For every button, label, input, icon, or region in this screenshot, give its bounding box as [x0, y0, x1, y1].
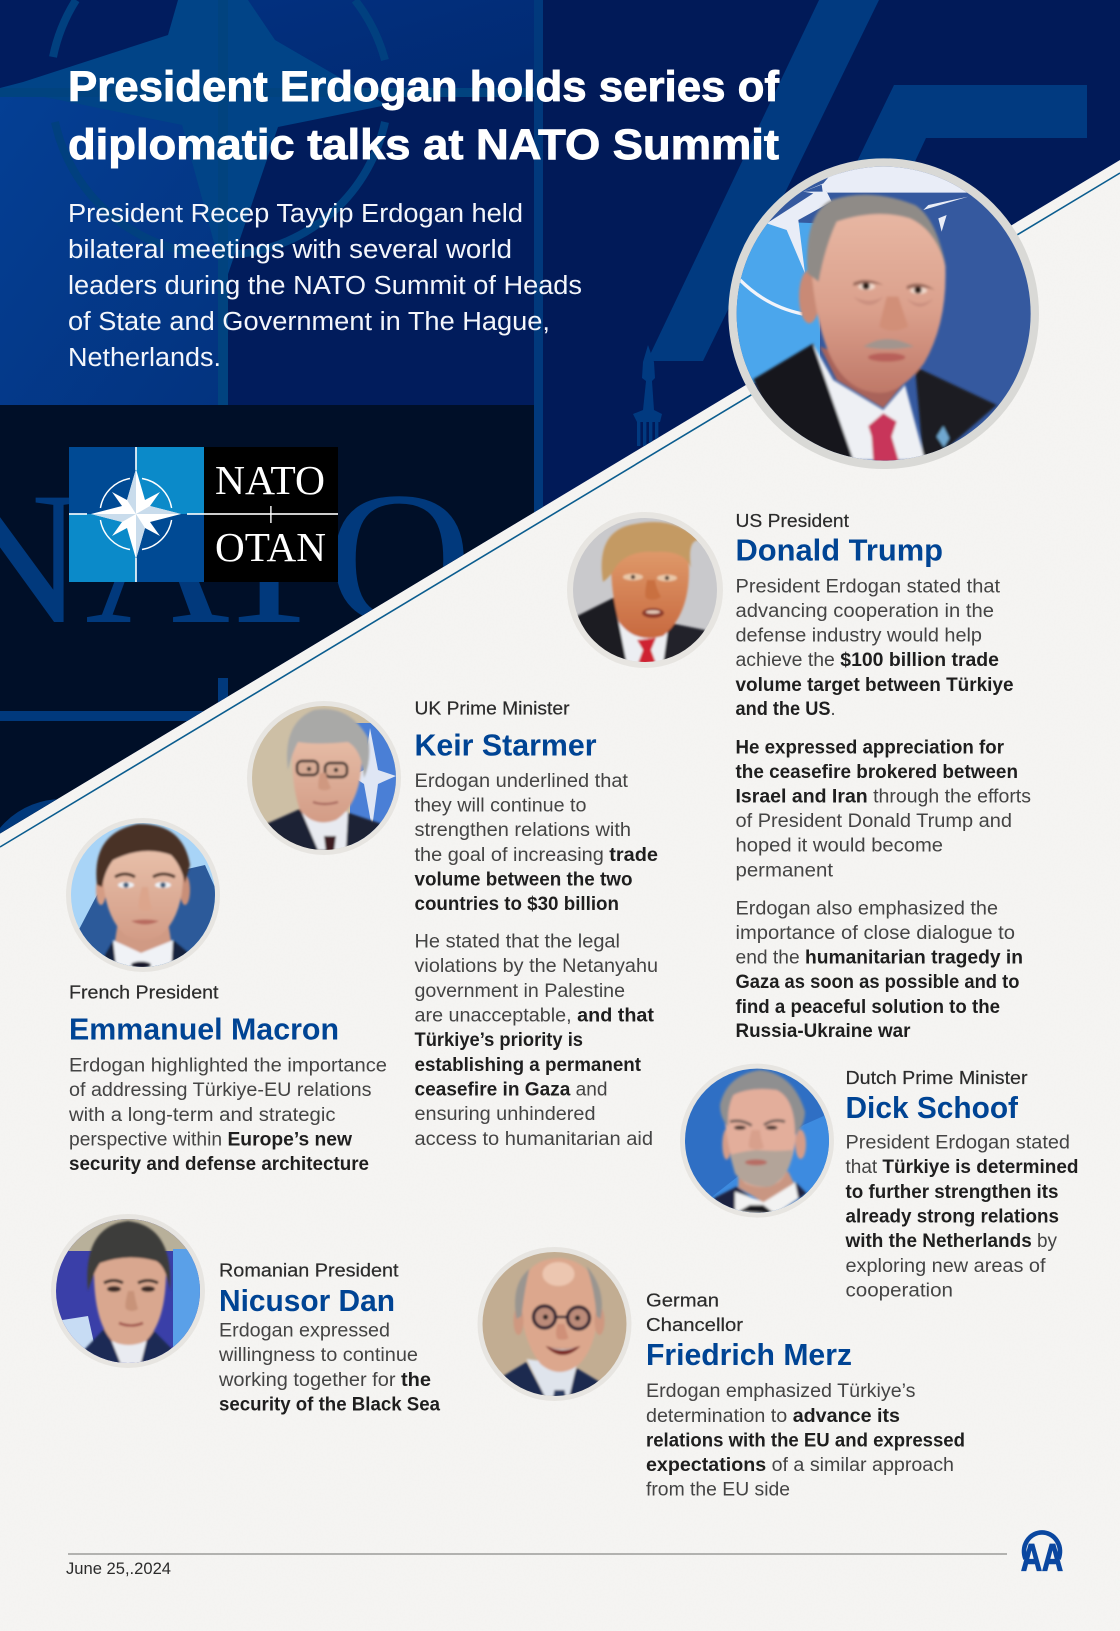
role: UK Prime Minister: UK Prime Minister [414, 698, 570, 719]
text block: Merz talks: determination to advance its [646, 1406, 900, 1427]
text block: Trump talks [736, 577, 1031, 1042]
name: Nicusor Dan: Nicusor Dan [219, 1283, 395, 1318]
text block: Schoof talks: cooperation [846, 1281, 953, 1302]
text block: Starmer talks: the goal of increasing trade [414, 845, 658, 866]
portrait: Donald Trump [565, 510, 725, 670]
text block: Trump talks: importance of close dialogue to [736, 923, 1015, 944]
intro text: President Recep Tayyip Erdogan held [68, 200, 523, 228]
text block: Starmer talks: strengthen relations with [414, 820, 631, 841]
panel: Friedrich Merz [474, 1244, 965, 1501]
icon: AA logo: AA [1021, 1538, 1063, 1580]
role: German Chancellor [646, 1290, 743, 1335]
text block: Macron talks: perspective within Europe’s new [69, 1130, 352, 1150]
text block: Macron talks: security and defense architecture [69, 1154, 369, 1175]
panel: Dick Schoof [680, 1064, 1078, 1302]
name: Dick Schoof: Dick Schoof [846, 1090, 1019, 1125]
NATO OTAN logo: OTAN [215, 524, 326, 570]
intro text: leaders during the NATO Summit of Heads [68, 272, 582, 300]
text block: Trump talks: permanent [736, 860, 834, 882]
diagonal accent line [0, 173, 1120, 847]
text block: Schoof talks [845, 1133, 1078, 1302]
text block: Macron talks: Erdogan highlighted the importance [69, 1056, 387, 1077]
text block: Trump talks: hoped it would become [736, 836, 943, 857]
intro text: of State and Government in The Hague, [68, 308, 550, 336]
panel: Donald Trump [565, 510, 1031, 1042]
name: Friedrich Merz: Friedrich Merz [646, 1337, 852, 1372]
text block: Dan talks: willingness to continue [218, 1345, 418, 1366]
intro text [68, 200, 582, 372]
text block: Trump talks: and the US. [736, 699, 836, 720]
text block: Starmer talks [414, 771, 658, 1150]
name: Emmanuel Macron: Emmanuel Macron [69, 1012, 339, 1046]
text block: Macron talks: with a long-term and strategic [68, 1105, 336, 1126]
name: Donald Trump: Donald Trump [736, 532, 943, 568]
text block: Schoof talks: that Türkiye is determined [846, 1157, 1078, 1178]
text block: Trump talks: find a peaceful solution to the [736, 997, 1000, 1018]
text block: Starmer talks: He stated that the legal [414, 932, 620, 953]
text block: Starmer talks: they will continue to [414, 796, 586, 817]
title: diplomatic talks at NATO Summit [68, 121, 779, 169]
title: President Erdogan holds series of [68, 63, 780, 111]
text block: Merz talks: relations with the EU and expressed [646, 1430, 965, 1452]
portrait: Nicusor Dan [48, 1211, 208, 1371]
text block: Dan talks: working together for the [218, 1370, 431, 1391]
text block: Schoof talks: with the Netherlands by [845, 1231, 1057, 1252]
text block: Merz talks: Erdogan emphasized Türkiye’s [646, 1381, 916, 1402]
text block: Starmer talks: establishing a permanent [414, 1055, 642, 1076]
text block: Starmer talks: ceasefire in Gaza and [414, 1080, 608, 1100]
panel: Emmanuel Macron [63, 815, 387, 1175]
text block: Schoof talks: exploring new areas of [846, 1256, 1046, 1277]
role: Romanian President: Romanian President [219, 1260, 398, 1281]
background: dark navy diagonal panel with NATO watermark [0, 0, 1120, 834]
text block: Trump talks: volume target between Türkiye [736, 675, 1014, 696]
intro text: Netherlands. [68, 344, 221, 372]
title [68, 63, 780, 169]
text block: Schoof talks: to further strengthen its [846, 1182, 1058, 1203]
text block: Dan talks: security of the Black Sea [219, 1394, 440, 1416]
text block: Starmer talks: access to humanitarian aid [414, 1129, 653, 1150]
NATO OTAN logo: NATO [215, 457, 325, 503]
text block: Starmer talks: are unacceptable, and that [414, 1006, 655, 1027]
role: French President: French President [69, 981, 218, 1002]
intro text: bilateral meetings with several world [68, 236, 512, 264]
text block: Starmer talks: Erdogan underlined that [414, 771, 629, 792]
portrait: Recep Tayyip Erdogan [732, 162, 1035, 465]
NATO OTAN logo [69, 447, 338, 582]
text block: Schoof talks: already strong relations [846, 1207, 1059, 1228]
text block: Trump talks: He expressed appreciation for [736, 738, 1005, 758]
text block: Trump talks: Russia-Ukraine war [736, 1021, 911, 1042]
text block: Starmer talks: ensuring unhindered [414, 1104, 596, 1125]
panel: Nicusor Dan [48, 1211, 440, 1416]
panel: Keir Starmer [244, 698, 658, 1150]
text block: Trump talks: of President Donald Trump and [736, 811, 1012, 832]
name: Keir Starmer: Keir Starmer [414, 728, 596, 763]
text block: Merz talks: expectations of a similar approach [646, 1455, 954, 1476]
text block: Trump talks: achieve the $100 billion trade [736, 650, 999, 671]
date: June 25,.2024 [66, 1559, 171, 1578]
portrait: Emmanuel Macron [63, 815, 223, 975]
text block: Macron talks [68, 1056, 387, 1175]
text block: Starmer talks: countries to $30 billion [414, 894, 619, 915]
portrait: Keir Starmer [244, 698, 404, 858]
text block: Starmer talks: government in Palestine [414, 981, 625, 1002]
text block: Trump talks: defense industry would help [736, 626, 982, 647]
text block: Trump talks: Gaza as soon as possible and to [736, 972, 1020, 993]
text block: Merz talks: from the EU side [646, 1480, 790, 1501]
text block: Trump talks: Erdogan also emphasized the [736, 898, 998, 920]
role: German Chancellor: German [646, 1290, 719, 1311]
text block: Trump talks: end the humanitarian tragedy in [736, 948, 1023, 968]
text block: Trump talks: President Erdogan stated that [736, 577, 1001, 598]
text block: Trump talks: the ceasefire brokered between [736, 762, 1018, 783]
text block: Macron talks: of addressing Türkiye-EU relations [69, 1080, 372, 1101]
text block: Trump talks: Israel and Iran through the efforts [736, 787, 1031, 808]
text block: Dan talks: Erdogan expressed [219, 1321, 390, 1342]
role: Dutch Prime Minister: Dutch Prime Minister [846, 1067, 1028, 1088]
portrait: Dick Schoof [680, 1064, 837, 1222]
text block: Dan talks [218, 1321, 440, 1416]
portrait: Friedrich Merz [474, 1244, 634, 1404]
text block: Starmer talks: volume between the two [414, 870, 632, 891]
text block: Merz talks [646, 1381, 965, 1501]
text block: Schoof talks: President Erdogan stated [846, 1133, 1070, 1154]
role: US President: US President [736, 510, 849, 531]
text block: Trump talks: advancing cooperation in the [736, 601, 994, 622]
text block: Starmer talks: violations by the Netanyahu [414, 956, 658, 977]
role: German Chancellor: Chancellor [646, 1314, 743, 1335]
text block: Starmer talks: Türkiye’s priority is [414, 1030, 583, 1051]
